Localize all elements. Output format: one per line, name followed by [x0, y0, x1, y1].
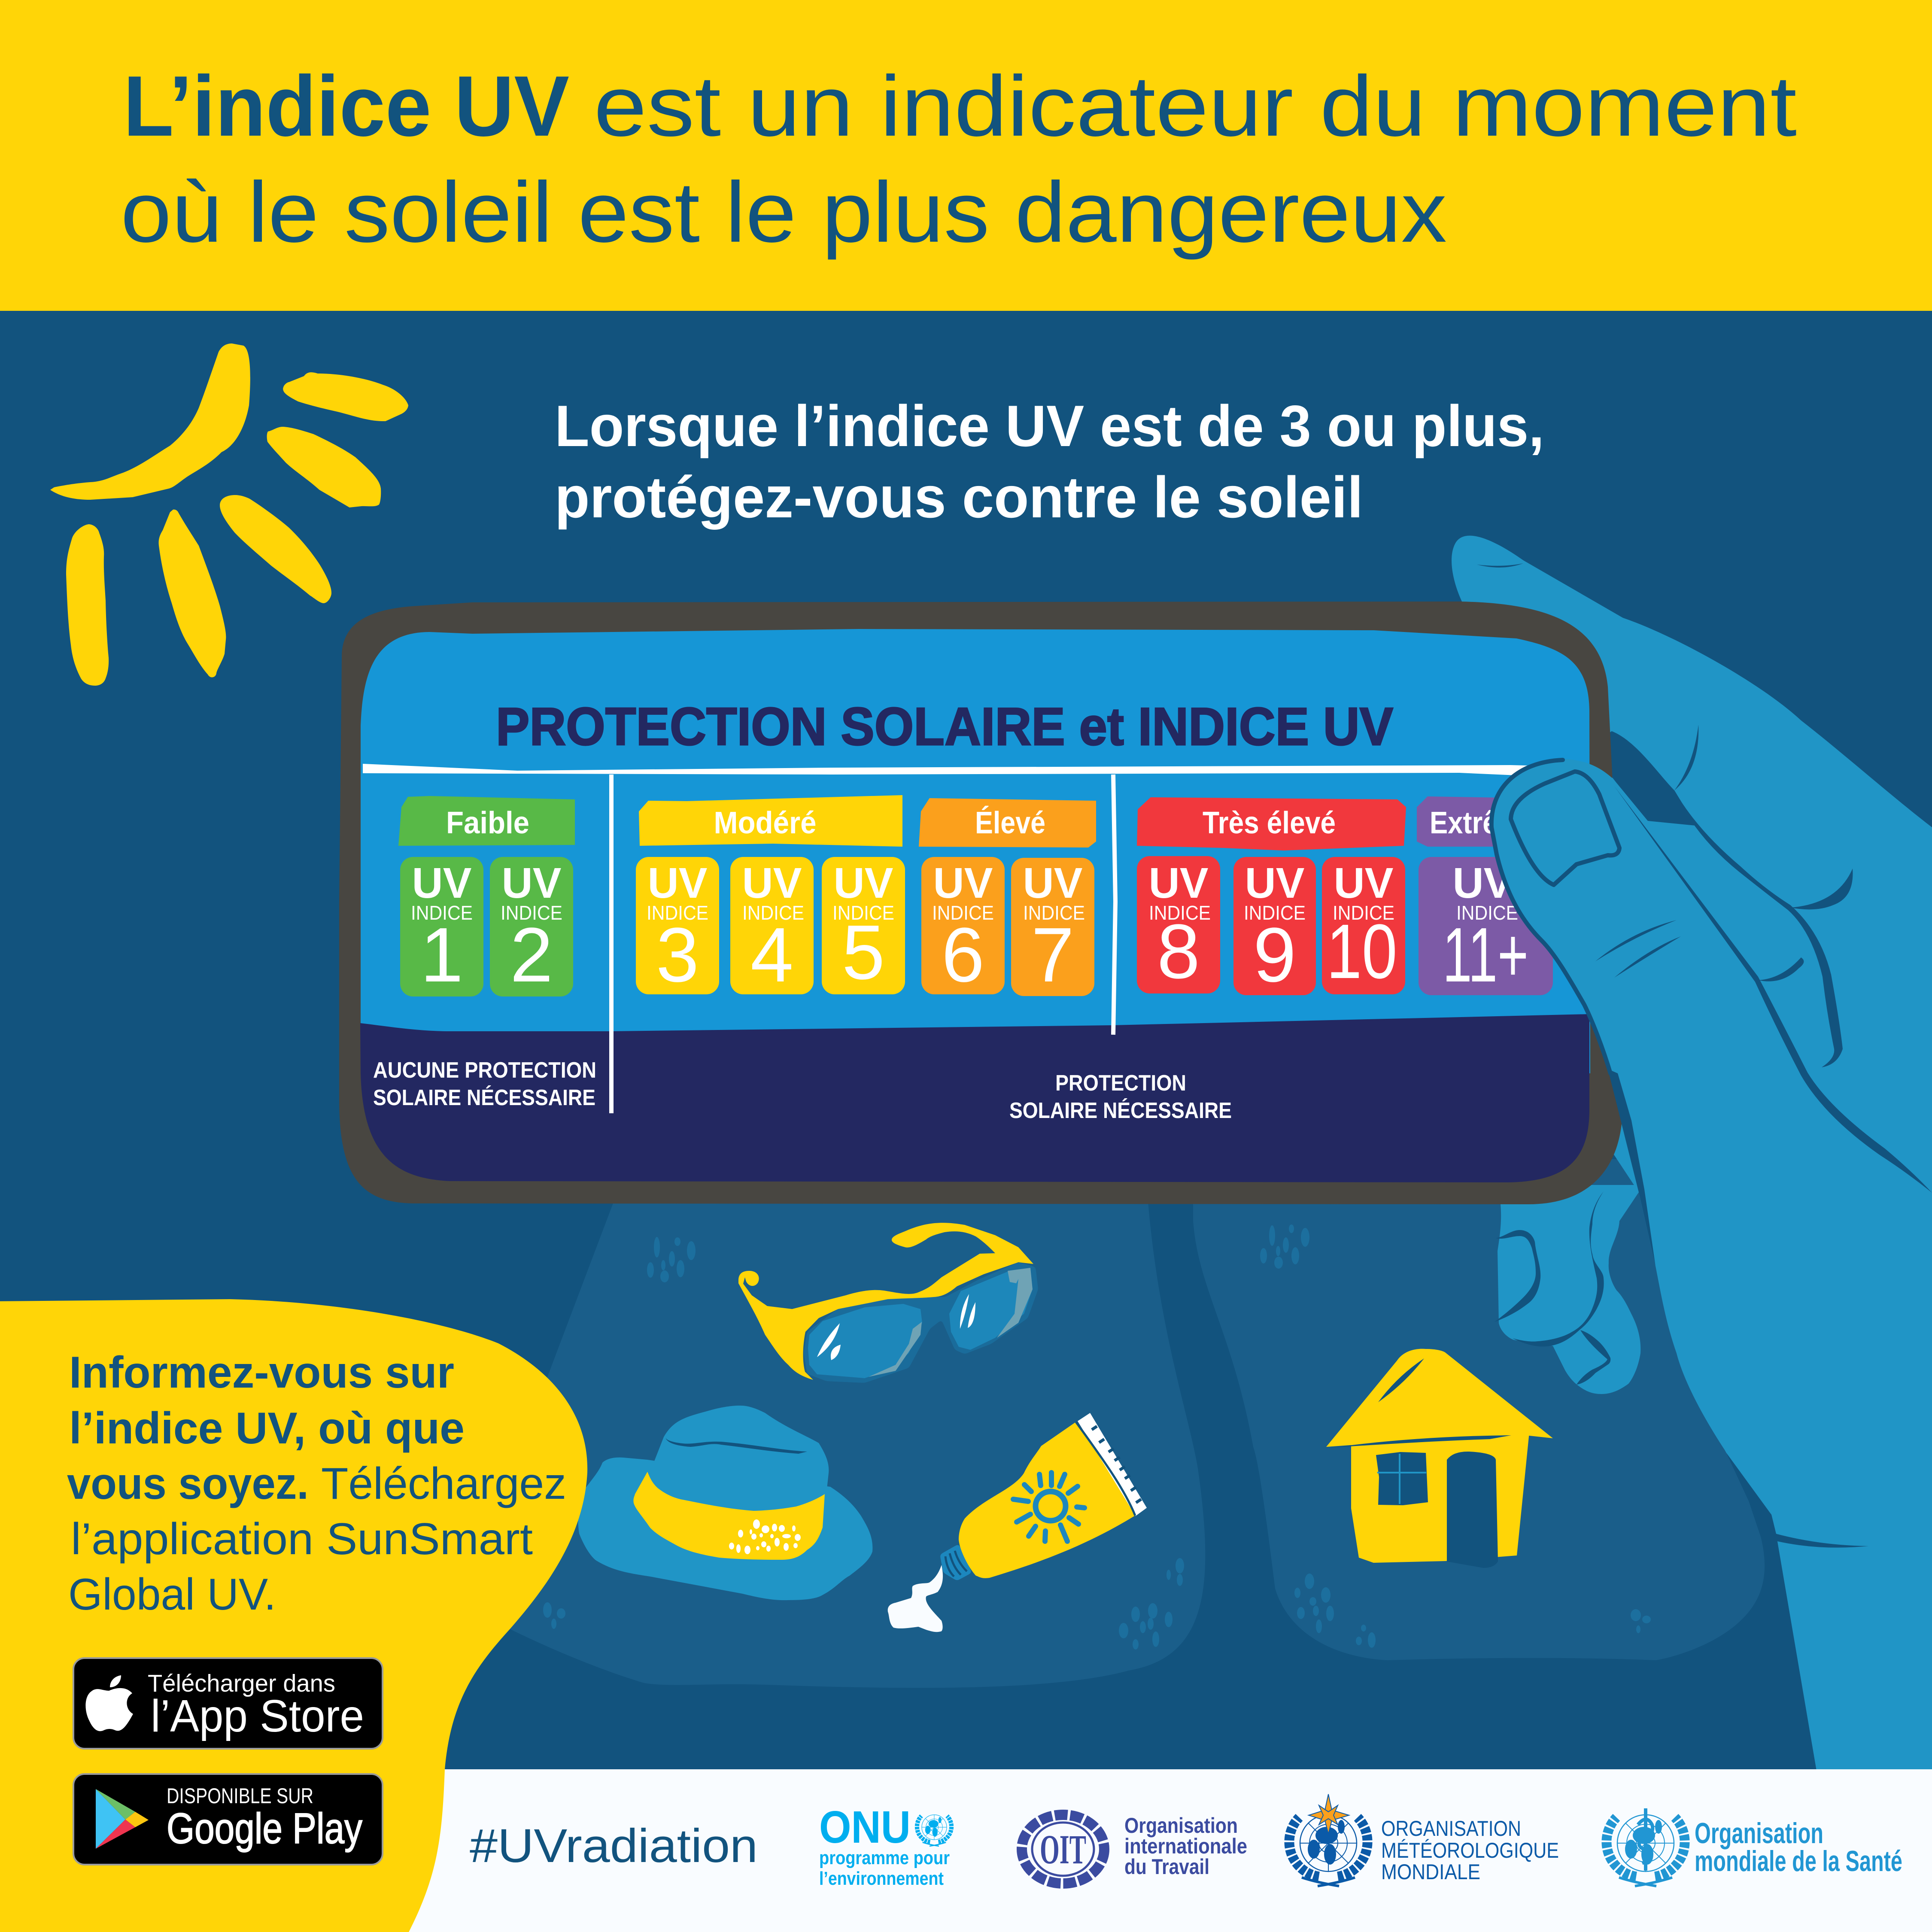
logo: oms: Organisation	[1695, 1817, 1823, 1850]
brim	[578, 1458, 872, 1600]
phone screen	[361, 629, 1590, 1073]
label: modere: Modéré	[714, 806, 817, 840]
card 7: UV	[1023, 859, 1083, 907]
card 6: UV	[933, 859, 993, 907]
card 1: 1	[420, 912, 463, 998]
label: modere	[639, 795, 902, 847]
background blob: left leg shape	[494, 1202, 1205, 1688]
header rule	[363, 764, 1546, 777]
eave line	[1331, 1435, 1511, 1448]
text: no protection needed: SOLAIRE NÉCESSAIRE	[373, 1085, 595, 1110]
hat band	[633, 1472, 825, 1560]
badge: google play: DISPONIBLE SUR	[167, 1784, 313, 1808]
band specks	[729, 1519, 801, 1554]
text: call to action: Global UV.	[68, 1570, 276, 1619]
card 4: 4	[750, 912, 793, 998]
logo: onu environnement: programme pour	[819, 1847, 950, 1868]
text: call to action	[67, 1348, 566, 1619]
card 6: 6	[942, 912, 984, 998]
panel: uv cards	[400, 856, 1553, 998]
specks on the ground	[543, 1224, 1651, 1649]
card 5	[822, 857, 905, 996]
card 9	[1233, 857, 1316, 998]
logo: onu environnement	[819, 1802, 951, 1889]
card 4: UV	[742, 859, 802, 907]
label: eleve: Élevé	[975, 806, 1045, 840]
card 11+: 11+	[1443, 912, 1528, 998]
sunscreen cream	[888, 1565, 943, 1632]
window	[1376, 1452, 1428, 1505]
label: eleve	[919, 798, 1096, 848]
badge: google play	[73, 1774, 383, 1865]
label: extreme	[1417, 796, 1554, 847]
logo: omm	[1289, 1794, 1559, 1886]
crimp line	[1076, 1422, 1135, 1516]
house body	[1351, 1432, 1529, 1563]
icon: sunscreen tube	[888, 1413, 1147, 1632]
text: call to action: Informez-vous sur	[69, 1348, 454, 1397]
card 11+: INDICE	[1456, 902, 1518, 924]
label: tres eleve	[1137, 797, 1406, 851]
lower fingers	[1498, 1185, 1640, 1394]
text: call to action: l’application SunSmart	[71, 1514, 533, 1564]
panel: phone	[339, 601, 1622, 1204]
badge: app store: l’App Store	[151, 1691, 364, 1741]
card 5: INDICE	[832, 902, 894, 924]
card 3	[636, 857, 719, 998]
card 9: INDICE	[1244, 902, 1306, 924]
subtitle	[555, 393, 1544, 530]
text: no protection needed: AUCUNE PROTECTION	[373, 1058, 596, 1083]
card 2: INDICE	[501, 902, 562, 924]
protection band	[360, 1014, 1589, 1182]
crown	[640, 1406, 829, 1528]
icon: house	[1326, 1349, 1553, 1568]
sun on tube	[1013, 1473, 1084, 1541]
text: protection needed: SOLAIRE NÉCESSAIRE	[1009, 1098, 1232, 1123]
title: L’indice UV	[123, 58, 569, 154]
finger creases	[1495, 1191, 1610, 1385]
frame	[738, 1223, 1033, 1380]
card 9: UV	[1245, 859, 1305, 907]
card 1: INDICE	[411, 902, 473, 924]
logo: oit: du Travail	[1124, 1855, 1209, 1879]
gap between thumb and finger	[1589, 731, 1696, 826]
card 3: UV	[648, 859, 708, 907]
phone bezel	[339, 601, 1622, 1204]
card 2	[490, 857, 573, 998]
card 1	[400, 857, 483, 998]
crown fold	[665, 1437, 807, 1454]
card 8: INDICE	[1149, 902, 1211, 924]
icon: hat	[578, 1406, 872, 1600]
panel: yellow call-to-action	[0, 1299, 587, 1932]
icon: sun rays	[50, 343, 408, 686]
label: tres eleve: Très élevé	[1203, 806, 1336, 840]
background blob: right leg shape	[1193, 1159, 1765, 1660]
logo: omm: ORGANISATION	[1381, 1817, 1521, 1841]
thumbnail	[1511, 772, 1619, 885]
hand creases	[1595, 725, 1932, 1548]
header band	[0, 0, 1932, 311]
lenses	[808, 1268, 1033, 1378]
wedge shadow	[1726, 1453, 1776, 1546]
text: protection needed: PROTECTION	[1055, 1071, 1186, 1096]
emblem	[1022, 1815, 1104, 1883]
card 4	[730, 857, 814, 998]
hand behind phone	[1452, 536, 1932, 1773]
card 2: UV	[502, 859, 562, 907]
card 10: INDICE	[1333, 902, 1394, 924]
card 8: UV	[1149, 859, 1209, 907]
card 2: 2	[510, 912, 553, 998]
card 6	[921, 857, 1005, 998]
title: où le soleil est le plus dangereux	[121, 164, 1447, 260]
card 8: 8	[1157, 908, 1200, 995]
icon: star	[1309, 1794, 1349, 1834]
footer band	[378, 1769, 1932, 1932]
icon: play triangle	[96, 1789, 149, 1849]
text: call to action: l’indice UV, où que	[69, 1403, 465, 1453]
logo: oit: internationale	[1124, 1834, 1247, 1858]
card 8	[1137, 856, 1220, 995]
card 11+: UV	[1453, 859, 1513, 907]
card 3: INDICE	[647, 902, 708, 924]
card 1: UV	[412, 859, 472, 907]
card 5: 5	[842, 909, 885, 996]
title: est un indicateur du moment	[594, 58, 1797, 154]
thumb shadow	[1608, 1069, 1656, 1266]
logo: omm: MONDIALE	[1381, 1860, 1480, 1884]
hashtag: #UVradiation	[470, 1820, 758, 1872]
badge: google play: Google Play	[167, 1804, 362, 1853]
emblem: OIT	[1040, 1826, 1086, 1872]
roof highlight	[1378, 1358, 1424, 1402]
logo: oit	[1022, 1814, 1247, 1883]
nozzle	[940, 1544, 972, 1581]
subtitle: Lorsque l’indice UV est de 3 ou plus,	[555, 393, 1544, 459]
door	[1447, 1452, 1498, 1568]
thumb outline	[1492, 760, 1610, 1073]
card 6: INDICE	[932, 902, 994, 924]
label: faible: Faible	[446, 806, 529, 840]
lens frame	[804, 1262, 1038, 1383]
card 4: INDICE	[742, 902, 804, 924]
card 7	[1011, 858, 1094, 998]
card 7: INDICE	[1023, 902, 1085, 924]
label: extreme: Extrême	[1430, 806, 1537, 840]
logo: oms	[1607, 1808, 1902, 1886]
text: call to action: Téléchargez	[321, 1459, 566, 1509]
text: no protection needed	[373, 1058, 596, 1110]
crimp ticks	[1092, 1426, 1141, 1503]
crimped end	[1078, 1413, 1147, 1516]
fingertip crease	[1477, 563, 1523, 568]
tube body	[959, 1422, 1135, 1578]
logo: onu environnement: l’environnement	[819, 1868, 944, 1889]
logo: onu environnement: ONU	[819, 1802, 911, 1853]
card 10	[1322, 857, 1405, 995]
heading: protection solaire: PROTECTION SOLAIRE et INDICE UV	[496, 697, 1393, 756]
dividers	[611, 775, 1115, 1113]
text: call to action: vous soyez.	[67, 1459, 309, 1509]
logo: oit: Organisation	[1124, 1814, 1238, 1838]
badge: app store	[73, 1658, 383, 1749]
subtitle: protégez-vous contre le soleil	[555, 465, 1363, 530]
card 10: UV	[1334, 859, 1394, 907]
icon: sunglasses	[738, 1223, 1038, 1383]
card 3: 3	[656, 912, 699, 998]
panel: category labels	[398, 795, 1554, 851]
icon: staff and serpent	[1638, 1808, 1653, 1871]
thumb	[1492, 759, 1760, 1288]
card 10: 10	[1327, 908, 1397, 995]
title	[121, 58, 1797, 260]
card 5: UV	[834, 859, 893, 907]
text: protection needed	[1009, 1071, 1232, 1123]
lens reflections	[817, 1268, 1033, 1377]
logo: omm: MÉTÉOROLOGIQUE	[1381, 1838, 1559, 1862]
nozzle ridges	[945, 1551, 967, 1577]
card 11+	[1419, 857, 1553, 998]
roof	[1326, 1349, 1553, 1447]
icon: apple	[85, 1675, 133, 1731]
back of hand	[1452, 536, 1932, 1773]
hand: thumb in front of phone	[1492, 725, 1932, 1548]
label: faible	[398, 796, 575, 846]
badge: app store: Télécharger dans	[148, 1670, 335, 1697]
card 7: 7	[1031, 912, 1074, 998]
card 9: 9	[1253, 912, 1296, 998]
